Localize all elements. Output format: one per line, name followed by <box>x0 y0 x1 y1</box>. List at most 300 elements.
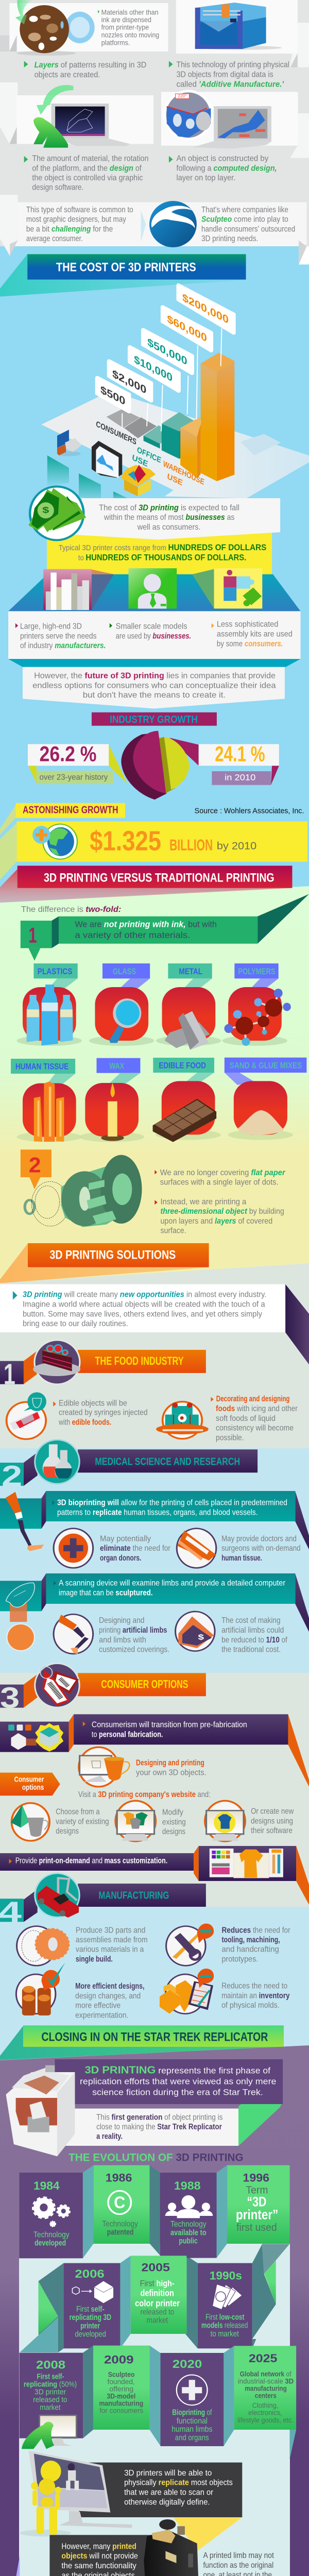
text: single build <box>76 1926 148 1963</box>
icon: frog <box>33 117 68 148</box>
panel: three user tiers <box>8 611 301 667</box>
text: challenging: This type of software is common to <box>26 206 133 214</box>
icon: gears <box>33 2198 70 2227</box>
label: $2,000: $2,000 <box>112 367 146 397</box>
card: 2008: 2008 <box>36 2359 65 2371</box>
icon: molecule <box>224 989 291 1046</box>
text: artificial limbs <box>99 1616 169 1654</box>
card: 2020: 2020 <box>173 2358 202 2371</box>
panel: flat vs 3D <box>0 1155 309 1391</box>
icon: bottles <box>27 985 73 1045</box>
icon: cake slice <box>33 1340 80 1384</box>
heading: the food industry <box>0 1350 206 1391</box>
chart: isometric printer cost bars <box>41 285 309 498</box>
heading: astonishing growth <box>0 803 125 835</box>
label: $50,000: $50,000 <box>147 336 187 368</box>
card: 2008: market <box>40 2404 61 2412</box>
card: 1990s <box>198 2263 252 2348</box>
text: human tissue <box>221 1534 301 1563</box>
text: cost is expected to fall: well as consumers. <box>137 523 201 532</box>
label: $500: $500 <box>100 383 125 408</box>
icon: syringe <box>7 1392 46 1439</box>
icon: frog and monitor <box>22 2415 77 2449</box>
card: 1986: Technology <box>102 2220 138 2228</box>
icon: puzzle <box>192 568 262 608</box>
text: visit a website: Visit a 3D printing company's website and: <box>78 1790 211 1799</box>
card: 2009 <box>93 2346 149 2430</box>
icon: 3D printed sphere <box>20 5 95 53</box>
card: 2006: First self- <box>76 2305 105 2314</box>
text: Sculpteo: Sculpteo come into play to <box>201 215 288 224</box>
text: manufacturers <box>15 622 106 650</box>
text: decorating foods: soft foods of liquid <box>216 1414 276 1423</box>
icon: patent circle: C <box>114 2194 125 2212</box>
text: future of 3D printing: However, the future of 3D printing lies in companies that provide <box>34 671 276 680</box>
icon: medical plus <box>54 1529 93 1568</box>
heading: astonishing growth: ASTONISHING GROWTH <box>23 804 118 816</box>
text: create new: designs using <box>251 1817 293 1825</box>
text: inventory: of physical molds. <box>221 2001 280 2010</box>
item: sand and glue <box>225 1058 306 1140</box>
icon: green arrow <box>15 0 33 24</box>
text: first phase: replication efforts that were viewed as only mere <box>80 2077 276 2086</box>
item: designing and printing <box>79 1747 207 1787</box>
text: cost reduced: be reduced to 1/10 of <box>221 1636 287 1645</box>
icon: limb <box>54 1614 93 1654</box>
text: consumers: Less sophisticated <box>217 620 278 629</box>
item: modify <box>115 1801 186 1841</box>
icon: people <box>165 2195 213 2218</box>
text: cost range: Typical 3D printer costs range from HUNDREDS OF DOLLARS <box>59 543 266 552</box>
heading: the cost of 3D printers: THE COST OF 3D PRINTERS <box>56 261 196 274</box>
text: additive manufacture: called 'Additive Manufacture.' <box>176 80 284 89</box>
text: replicate: otherwise digitally define. <box>124 2498 210 2506</box>
card: 2025: manufacturing <box>245 2385 287 2393</box>
card: 2009: 2009 <box>104 2354 133 2366</box>
label: warehouse use <box>163 459 204 488</box>
text: edible objects <box>53 1399 148 1427</box>
panel: print on demand: Provide print-on-demand and mass customization. <box>15 1857 167 1865</box>
text: future of 3D printing <box>23 667 285 708</box>
text: new opportunities: button. Some may save lives, others extend lives, and yet others simply <box>23 1310 263 1318</box>
heading: consumer options <box>0 1673 206 1714</box>
card: 2006 <box>64 2263 120 2348</box>
icon: boxes and clipboard <box>160 1969 214 2014</box>
text: printed objects <box>61 2542 138 2576</box>
text: materials <box>98 8 159 47</box>
panel: materials dispensed <box>9 0 168 56</box>
card: 2005: market <box>147 2316 168 2325</box>
panel: industry growth <box>0 713 309 961</box>
callout: 24.1 percent: in 2010 <box>225 773 255 782</box>
item: metal: METAL <box>179 967 202 976</box>
text: printed objects: the same functionality <box>61 2562 136 2570</box>
text: tooling: prototypes. <box>221 1955 258 1963</box>
text: cost reduced <box>221 1616 287 1654</box>
text: businesses: Smaller scale models <box>116 622 187 631</box>
tag: consumer options <box>0 1773 60 1795</box>
text: human tissue: human tissue. <box>221 1554 262 1563</box>
card: 2025: Clothing, <box>252 2401 278 2410</box>
item: plastics: PLASTICS <box>38 967 72 976</box>
icon: candle <box>101 1083 124 1141</box>
card: 1996: Term <box>246 2184 268 2196</box>
card: 2025 <box>234 2346 296 2430</box>
text: first phase: 3D PRINTING represents the first phase of <box>85 2064 271 2076</box>
text: organ donors: May potentially <box>100 1534 151 1543</box>
label: office use <box>132 444 161 469</box>
text: materials: from printer-type <box>101 24 149 31</box>
text: cost range: to HUNDREDS OF THOUSANDS OF DOLLARS. <box>78 552 246 562</box>
icon: open box <box>120 465 156 496</box>
text: efficient designs: more effective <box>75 2002 121 2010</box>
text: computed design <box>169 155 277 182</box>
text: replicate <box>124 2469 233 2506</box>
card: 2005: color printer <box>135 2298 180 2308</box>
card: 2008: 3D printer <box>35 2388 66 2396</box>
card: 2020: functional <box>177 2417 208 2426</box>
text: first generation: a reality. <box>96 2132 123 2141</box>
card: 2025: 2025 <box>249 2352 277 2365</box>
panel: how 3D printing works <box>0 0 309 264</box>
item: artificial limbs <box>54 1614 169 1654</box>
text: single build: Produce 3D parts and <box>76 1926 145 1935</box>
icon: small cube to big cube <box>72 2281 113 2303</box>
card: 1986: 1986 <box>106 2172 132 2184</box>
text: consumers <box>212 620 293 648</box>
icon: monitor with shirts <box>115 1801 156 1841</box>
label: $2,000 <box>109 361 151 401</box>
text: layers: objects are created. <box>35 71 100 79</box>
text: efficient designs: experimentation. <box>75 2011 128 2020</box>
icon: metal bars <box>165 1011 210 1050</box>
icon: globe <box>32 824 77 859</box>
panel: 1.325 billion <box>0 821 307 879</box>
card: 1996: first used <box>236 2222 277 2233</box>
text: modify <box>162 1808 186 1836</box>
heading: 3D printing solutions: 3D PRINTING SOLUTIONS <box>49 1248 176 1262</box>
text: efficient designs: design changes, and <box>75 1992 141 2001</box>
card: 1996 <box>227 2165 289 2244</box>
text: create new <box>251 1807 294 1835</box>
text: cost reduced: The cost of making <box>221 1616 281 1625</box>
icon: tissue strands <box>177 1529 216 1568</box>
item: wax <box>79 1058 144 1142</box>
card: 1988: Technology <box>170 2220 207 2229</box>
icon: scanned limb to skin <box>6 1583 35 1651</box>
text: printed objects: objects will not provide <box>61 2552 138 2561</box>
icon: magnifying glass <box>109 998 141 1043</box>
text: cost is expected to fall <box>75 498 280 539</box>
text: consumers: by some consumers. <box>217 640 283 648</box>
icon: plus circle <box>177 2375 208 2405</box>
item: glass: GLASS <box>113 967 136 976</box>
panel: conclusion and credits <box>10 2556 296 2576</box>
icon: tiered cake <box>156 1402 209 1439</box>
card: 1986: patented <box>107 2228 133 2236</box>
panel: point 1: We are not printing with ink, but with <box>75 920 217 929</box>
text: businesses: are used by businesses. <box>116 632 191 640</box>
text: challenging: be a bit challenging for the <box>26 225 113 233</box>
card: 1988 <box>160 2173 217 2258</box>
text: choose: variety of existing <box>56 1817 109 1826</box>
panel: cost explanation <box>8 486 301 708</box>
text: layers <box>24 61 146 79</box>
text: efficient designs: More efficient designs, <box>75 1982 144 1991</box>
item: glass <box>89 963 154 1046</box>
heading: industry growth <box>92 713 217 726</box>
text: new opportunities: Imagine a world where actual objects will be created with the touch of a <box>23 1300 265 1309</box>
text: inventory <box>221 1982 290 2010</box>
card: 1996: 1996 <box>243 2172 269 2184</box>
heading: medical science and research: 2 <box>2 1460 22 1492</box>
icon: robot arm and car <box>35 1873 79 1918</box>
card: 2020: Bioprinting of <box>172 2409 212 2417</box>
text: future of 3D printing: endless options for consumers who can conceptualize their idea <box>32 681 277 690</box>
text: modify: existing <box>162 1818 186 1826</box>
text: consumers: assembly kits are used <box>217 630 293 638</box>
text: efficient designs <box>75 1982 144 2020</box>
text: challenging: most graphic designers, but may <box>26 215 126 224</box>
item: create new <box>205 1801 294 1841</box>
text: edible objects: Edible objects will be <box>59 1399 127 1408</box>
icon: tools <box>166 1924 214 1965</box>
text: create new: Or create new <box>251 1807 294 1816</box>
heading: the food industry: 1 <box>4 1358 15 1391</box>
text: first generation <box>96 2113 222 2141</box>
card: 2009: founded, <box>108 2378 135 2386</box>
card: 2005: First high- <box>140 2279 175 2288</box>
callout: 26.2 percent: over 23-year history <box>40 772 108 782</box>
card: 2025: centers <box>255 2392 277 2400</box>
icon: Sculpteo logo <box>149 201 197 247</box>
heading: consumer options: CONSUMER OPTIONS <box>101 1679 188 1691</box>
panel: bioprinting banner: patterns to replicate human tissues, organs, and blood vessels. <box>57 1509 258 1517</box>
icon: flasks <box>35 1440 79 1484</box>
text: amount of material: of the platform, and the design of <box>32 164 142 173</box>
icon: rollers and check <box>16 1962 65 2015</box>
icon: price tags <box>35 1664 79 1707</box>
heading: industry growth: INDUSTRY GROWTH <box>110 714 198 725</box>
heading: the cost of 3D printers <box>0 254 246 297</box>
text: new opportunities: bring ease to our daily routines. <box>23 1319 128 1328</box>
label: $200,000: $200,000 <box>182 291 229 327</box>
text: first phase <box>80 2064 276 2097</box>
item: edible food: EDIBLE FOOD <box>159 1061 206 1070</box>
heading: medical science and research <box>0 1449 258 1492</box>
card: 2006: replicating 3D <box>70 2313 111 2322</box>
panel: 1.325 billion: BILLION <box>169 836 213 854</box>
text: amount of material: the object is controlled via graphic <box>32 174 143 182</box>
icon: prosthetic leg <box>6 1492 44 1551</box>
item: efficient designs <box>16 1962 144 2020</box>
heading: manufacturing <box>0 1884 206 1928</box>
text: three-dimensional object: upon layers and layers of covered <box>160 1217 272 1226</box>
text: new opportunities <box>0 1284 309 1364</box>
text: Sculpteo: 3D printing needs. <box>201 234 258 243</box>
heading: evolution: THE EVOLUTION OF 3D PRINTING <box>68 2151 244 2163</box>
text: challenging <box>26 206 133 243</box>
text: tooling: tooling, machining, <box>221 1936 280 1944</box>
panel: frog on laptop <box>9 85 153 148</box>
panel: 3D printer illustration <box>176 0 298 54</box>
text: no longer flat: We are no longer covering flat paper <box>160 1168 286 1177</box>
icon: business person <box>128 568 177 608</box>
panel: functionality caveat <box>49 2519 276 2576</box>
text: cost is expected to fall: The cost of 3D printing is expected to fall <box>99 503 239 512</box>
text: artificial limbs: customized coverings. <box>99 1646 169 1654</box>
card: 2009: offering <box>109 2385 133 2393</box>
panel: the cost of 3D printers <box>0 254 309 502</box>
heading: 3D printing solutions <box>0 1243 209 1283</box>
card: 2005: 2005 <box>141 2262 170 2274</box>
card: 2008: First self- <box>37 2372 64 2381</box>
label: consumers: CONSUMERS <box>96 418 136 447</box>
text: artificial limbs: Designing and <box>99 1616 144 1625</box>
text: computed design: layer on top layer. <box>176 174 235 182</box>
text: cost reduced: artificial limbs could <box>221 1626 284 1635</box>
text: designing and printing: Designing and printing <box>136 1758 204 1767</box>
card: 2009: for consumers <box>99 2407 143 2415</box>
text: tooling: and handcrafting <box>221 1945 279 1954</box>
text: printed objects: However, many printed <box>61 2542 136 2551</box>
text: three-dimensional object <box>154 1197 284 1235</box>
card: 1996: “3D <box>247 2194 266 2210</box>
label: office use: OFFICE <box>137 444 161 465</box>
panel: evolution of 3D printing timeline <box>19 2151 289 2352</box>
panel: materials grid <box>11 963 306 1189</box>
icon: patent circle <box>108 2191 131 2214</box>
panel: 1.325 billion: $1.325 <box>90 826 161 856</box>
text: artificial limbs: and limbs with <box>99 1636 146 1645</box>
text: designing and printing <box>136 1758 207 1777</box>
text: two-fold: The difference is two-fold: <box>21 905 121 914</box>
icon: swatches and cube <box>8 1723 63 1752</box>
label: warehouse use: USE <box>167 471 183 488</box>
label: $500 <box>97 378 129 412</box>
card: 1988: 1988 <box>174 2180 201 2193</box>
card: 2005: definition <box>140 2288 174 2298</box>
icon: monitor with new shirt <box>205 1801 245 1841</box>
text: three-dimensional object: three-dimensional object by building <box>160 1207 284 1216</box>
text: organ donors <box>100 1534 170 1563</box>
text: printed limb: function as the original <box>203 2561 273 2570</box>
text: tooling: Reduces the need for <box>221 1926 290 1935</box>
text: amount of material <box>24 155 149 192</box>
card: 2009: manufacturing <box>99 2399 143 2408</box>
text: materials: ink are dispensed <box>101 16 151 24</box>
text: decorating foods: possible. <box>216 1434 244 1442</box>
panel: 3D printers replicate <box>20 2451 242 2551</box>
text: manufacturers: Large, high-end 3D <box>20 622 82 631</box>
text: no longer flat: surfaces with a single layer of dots. <box>160 1178 279 1187</box>
panel: evolution continued and the future <box>19 2346 296 2576</box>
icon: buildings <box>43 569 114 610</box>
panel: print on demand <box>0 1846 309 1905</box>
text: inventory: Reduces the need to <box>221 1982 287 1990</box>
text: single build: various materials in a <box>76 1945 144 1954</box>
icon: chocolate bar <box>153 1099 216 1142</box>
item: plastics <box>17 963 82 1046</box>
card: 1988: available to <box>170 2228 207 2237</box>
text: organ donors: eliminate the need for <box>100 1544 170 1553</box>
text: new opportunities: 3D printing will create many new opportunities in almost every industry. <box>23 1291 266 1299</box>
text: edible objects: created by syringes injected <box>59 1409 148 1417</box>
item: human tissue: HUMAN TISSUE <box>15 1061 68 1071</box>
text: decorating foods <box>211 1395 298 1442</box>
text: additive manufacture <box>169 61 289 89</box>
label: $10,000 <box>130 347 179 391</box>
card: 2020: and organs <box>175 2433 209 2442</box>
icon: magnified detail: 220° <box>178 94 186 98</box>
chart: pie <box>109 731 199 800</box>
tag: consumer options: Consumer <box>14 1776 44 1784</box>
text: manufacturers: printers serve the needs <box>20 632 96 640</box>
panel: point 1 <box>21 894 309 961</box>
panel: bioprinting banner <box>0 1491 309 1549</box>
text: Sculpteo <box>201 206 295 243</box>
callout: 24.1 percent: 24.1 % <box>215 742 265 766</box>
text: cost reduced: the traditional cost. <box>221 1646 281 1654</box>
card: 2005 <box>131 2256 186 2334</box>
item: tooling <box>166 1924 290 1965</box>
panel: point 1: a variety of other materials. <box>75 930 190 940</box>
icon: money: $ <box>198 1633 204 1641</box>
callout: 24.1 percent <box>199 742 279 785</box>
panel: computed part on laptop <box>161 90 298 148</box>
text: materials: platforms. <box>101 39 130 47</box>
panel: scanning banner: image that can be sculptured. <box>59 1588 153 1597</box>
card: 1990s: First low-cost <box>205 2313 245 2321</box>
text: inventory: maintain an inventory <box>221 1991 290 2000</box>
text: businesses <box>110 622 191 640</box>
card: 2009: Sculpteo <box>108 2370 134 2379</box>
item: single build <box>17 1926 148 1965</box>
panel: consumer options <box>0 1664 309 1905</box>
card: 2008 <box>19 2353 83 2449</box>
card: 2020: human limbs <box>171 2425 212 2434</box>
icon: money <box>176 1612 215 1651</box>
panel: point 2 <box>21 1149 52 1189</box>
heading: manufacturing: MANUFACTURING <box>98 1889 169 1901</box>
text: computed design: following a computed design, <box>176 164 277 173</box>
label: warehouse use: WAREHOUSE <box>163 459 204 487</box>
label: office use: USE <box>132 452 148 469</box>
text: single build: single build. <box>76 1955 113 1963</box>
text: modify: Modify <box>162 1808 183 1817</box>
item: organ donors <box>54 1529 170 1568</box>
card: 1996: printer” <box>236 2207 278 2223</box>
panel: 1.325 billion: by 2010 <box>217 840 256 852</box>
icon: puzzle kit <box>57 430 82 456</box>
text: choose <box>56 1807 109 1836</box>
icon: green arrow <box>37 85 73 115</box>
card: 1984: Technology <box>33 2230 70 2239</box>
text: tooling <box>221 1926 290 1963</box>
item: human tissue <box>11 1059 82 1142</box>
icon: orange gear <box>17 1926 69 1965</box>
panel: scanning banner <box>0 1573 309 1632</box>
card: 2025: lifestyle goods, etc. <box>237 2416 294 2425</box>
card: 2020 <box>160 2353 224 2446</box>
item: wax: WAX <box>109 1061 124 1071</box>
text: replicate: that we are able to scan or <box>124 2488 213 2497</box>
text: manufacturers: of industry manufacturers. <box>20 641 106 650</box>
text: materials: Materials other than <box>101 8 159 16</box>
heading: medical science and research: MEDICAL SCIENCE AND RESEARCH <box>95 1455 240 1467</box>
callout: 26.2 percent <box>28 742 113 784</box>
text: cost is expected to fall: within the means of most businesses as <box>104 513 234 522</box>
